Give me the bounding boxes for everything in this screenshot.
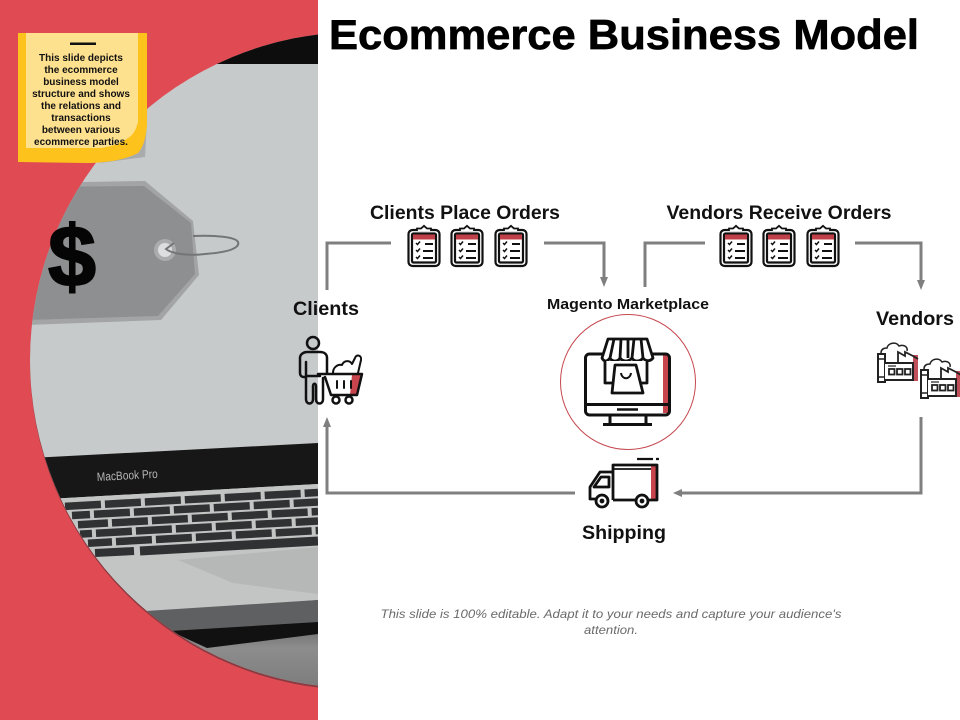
laptop deck	[60, 484, 318, 624]
heading: clients place orders: Clients Place Orders	[370, 203, 560, 224]
icon: monitor	[586, 354, 670, 424]
arrow: marketplace to vendors	[645, 243, 925, 290]
icons: vendor factories	[878, 343, 960, 398]
node: magento marketplace circle with storefront monitor	[560, 314, 696, 450]
icons: vendor order clipboards	[720, 226, 838, 266]
photo: laptop with price tag, clipped to a circle: MacBook Pro	[96, 467, 158, 484]
photo: laptop with price tag, clipped to a circle	[30, 34, 318, 688]
sticky note	[18, 33, 147, 163]
sticky text: the ecommerce	[44, 65, 118, 76]
sticky text: between various	[42, 125, 121, 136]
sticky text: This slide depicts	[39, 53, 123, 64]
footer note: This slide is 100% editable. Adapt it to your needs and capture your audience's	[380, 607, 842, 621]
sticky dash	[70, 42, 96, 45]
keyboard keys	[65, 492, 318, 553]
icon: client with shopping cart	[300, 337, 362, 404]
price tag	[20, 181, 238, 325]
label: magento marketplace: Magento Marketplace	[547, 296, 709, 313]
sticky text: structure and shows	[32, 89, 130, 100]
arrow: vendors to shipping	[673, 417, 921, 497]
footer note: attention.	[584, 623, 638, 637]
arrow: shipping to clients	[323, 417, 575, 493]
title: Ecommerce Business Model	[329, 11, 919, 58]
label: clients: Clients	[293, 299, 359, 320]
sticky text: business model	[43, 77, 119, 88]
sticky text: ecommerce parties.	[34, 137, 128, 148]
laptop front edge	[152, 600, 318, 686]
footer note	[380, 607, 842, 637]
heading: vendors receive orders: Vendors Receive Orders	[666, 203, 892, 224]
icon: dollar sign: $	[48, 209, 96, 305]
arrow: clients to marketplace	[327, 243, 608, 290]
laptop lid band	[30, 443, 318, 500]
label: shipping: Shipping	[582, 523, 666, 544]
icons: client order clipboards	[408, 226, 526, 266]
sticky text: the relations and	[41, 101, 121, 112]
label: vendors: Vendors	[876, 309, 954, 330]
icon: delivery truck	[590, 459, 659, 507]
sticky text	[32, 53, 130, 148]
sticky text: transactions	[51, 113, 111, 124]
background: red left panel	[0, 0, 318, 720]
icon: storefront awning and bag	[602, 339, 653, 393]
